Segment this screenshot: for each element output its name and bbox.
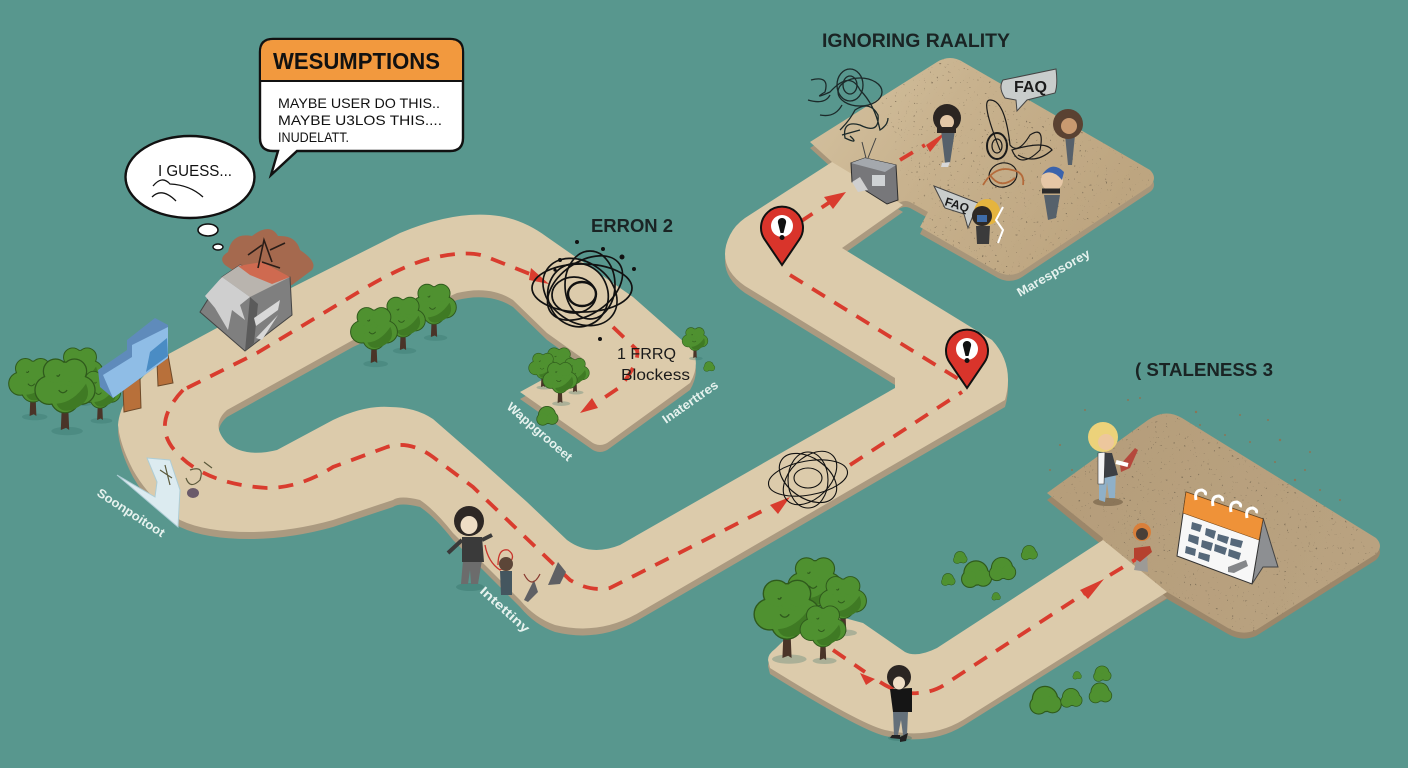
panel: plaza ignoring reality — [800, 58, 1154, 281]
dust specks around staleness plaza — [1049, 397, 1341, 501]
icon: FAQ speech bubble lower — [934, 186, 978, 228]
icon: person by tangled red line — [448, 506, 566, 602]
icon: desk calendar — [1177, 490, 1278, 584]
bushes near bottom road — [941, 545, 1112, 715]
icon: map pin left — [761, 207, 803, 265]
icon: plaza person long hair — [1053, 109, 1083, 165]
thought bubble: I guess — [126, 136, 254, 250]
arrowheads on the route — [529, 131, 1104, 685]
icon: broken grey machine with smoke — [200, 229, 314, 351]
icon: FAQ speech bubble top: FAQ — [1014, 79, 1047, 96]
trees: left grove — [9, 348, 120, 435]
thought bubble: I guess: I GUESS... — [158, 163, 232, 180]
icon: map pin right — [946, 330, 988, 388]
trees: bottom grove — [755, 558, 866, 664]
heading: staleness 3: ( STALENESS 3 — [1135, 359, 1273, 380]
icon: person standing on bottom road — [887, 665, 912, 742]
callout: assumptions: WESUMPTIONS — [273, 48, 440, 74]
icon: FAQ speech bubble top — [1001, 69, 1057, 111]
text: FAQ blockage note — [617, 346, 690, 384]
callout: assumptions: MAYBE USER DO THIS.. — [278, 95, 440, 111]
road: main winding path — [118, 162, 1008, 635]
label: sonnpoitool: Soonpoitoot — [94, 486, 168, 540]
dashed route: first leg to error scribble — [165, 145, 1138, 693]
road: bottom right segment — [768, 540, 1167, 739]
icon: grey machine on plaza — [851, 138, 898, 204]
callout: assumptions: INUDELATT. — [278, 129, 349, 145]
icon: FAQ speech bubble lower: FAQ — [943, 195, 971, 215]
icon: plaza person blue cap — [1041, 167, 1064, 220]
icon: scribble on lower diagonal road — [766, 441, 850, 515]
icon: torn paper and debris — [117, 458, 212, 527]
icon: plaza person yellow helmet — [972, 199, 1003, 244]
icon: blonde person with tool — [1088, 422, 1138, 506]
callout: assumptions: MAYBE U3LOS THIS.... — [278, 112, 442, 128]
text: FAQ blockage note: 1 FRRQ — [617, 346, 676, 363]
label: interties: Inaterttres — [660, 378, 721, 426]
icon: blue signboard — [98, 318, 173, 412]
trees: blockage group — [529, 328, 715, 426]
icon: small orange person on plinth — [1133, 523, 1152, 572]
icon: black scribble error — [530, 240, 636, 341]
heading: error 2: ERRON 2 — [591, 216, 673, 236]
label: intettiny: Intettiny — [477, 584, 532, 636]
trees: road group — [351, 285, 456, 367]
heading: ignoring reality: IGNORING RAALITY — [822, 31, 1010, 52]
text: FAQ blockage note: Blockess — [621, 367, 690, 384]
icon: central tangled knot on plaza — [983, 100, 1052, 190]
label: marespsorey: Marespsorey — [1014, 246, 1093, 300]
icon: plaza person arms crossed — [933, 104, 961, 167]
panel: plaza staleness — [1047, 413, 1380, 650]
label: wappgroooet: Wappgrooeet — [504, 400, 576, 465]
icon: top-left tangled scribble — [808, 69, 888, 141]
callout: assumptions — [260, 39, 463, 175]
